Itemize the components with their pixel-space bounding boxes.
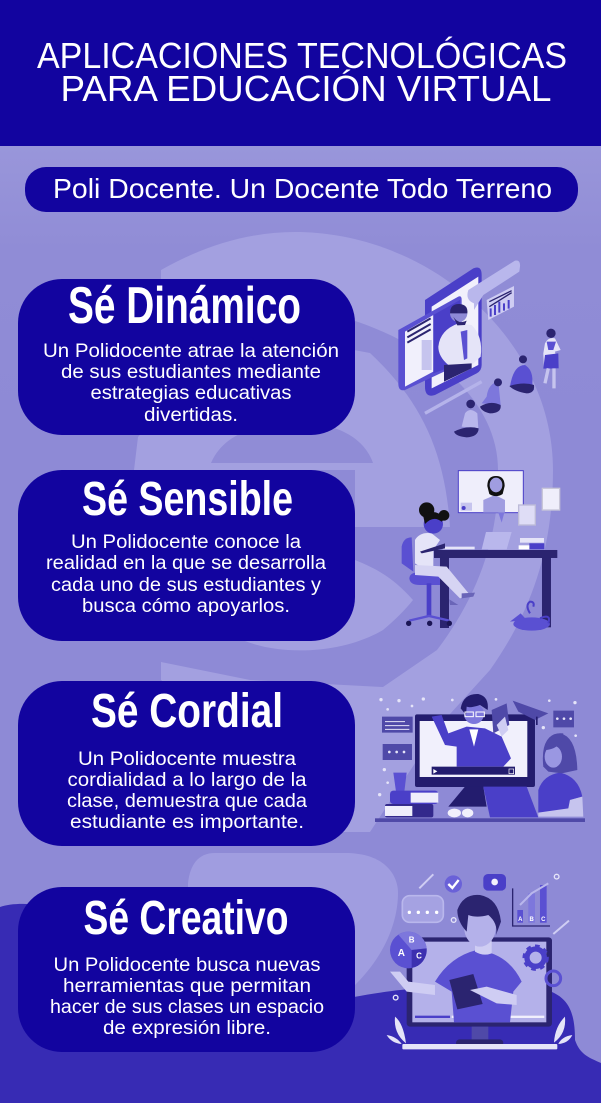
title: APLICACIONES TECNOLÓGICAS: [37, 35, 567, 76]
panel: Sé Dinámico: [18, 277, 355, 435]
illustration: teacher on monitor with charts: A: [398, 948, 405, 959]
panel: Sé Dinámico: Sé Dinámico: [68, 277, 301, 335]
panel: Sé Dinámico: de sus estudiantes mediante: [61, 362, 321, 383]
panel: Sé Dinámico: estrategias educativas: [90, 383, 292, 404]
panel: Sé Creativo: herramientas que permitan: [63, 976, 311, 997]
panel: Sé Cordial: cordialidad a lo largo de la: [68, 770, 307, 791]
panel: Sé Creativo: de expresión libre.: [103, 1018, 271, 1039]
panel: Sé Cordial: estudiante es importante.: [70, 812, 304, 833]
background watermark logo: [134, 232, 553, 985]
illustration: teacher on monitor with charts: C: [416, 951, 422, 960]
panel: Sé Sensible: realidad en la que se desarrolla: [46, 553, 326, 574]
title: PARA EDUCACIÓN VIRTUAL: [60, 68, 552, 109]
panel: Sé Sensible: busca cómo apoyarlos.: [82, 596, 290, 617]
panel: Sé Cordial: Un Polidocente muestra: [78, 749, 296, 770]
header band: [0, 0, 601, 146]
panel: Sé Sensible: Sé Sensible: [82, 473, 293, 526]
subtitle pill: [25, 167, 578, 212]
illustration: teacher on monitor with charts: B: [529, 917, 534, 923]
bottom wave: [0, 904, 601, 1103]
title: [37, 35, 567, 109]
illustration: student at desk with video call: [402, 471, 560, 631]
panel: Sé Dinámico: divertidas.: [144, 405, 238, 426]
illustration: teacher on monitor with charts: B: [409, 936, 415, 945]
illustration: teacher on phone with students: [398, 260, 561, 437]
panel: Sé Creativo: hacer de sus clases un espacio: [50, 997, 324, 1018]
panel: Sé Cordial: Sé Cordial: [91, 685, 283, 738]
panel: Sé Creativo: [18, 887, 355, 1052]
panel: Sé Dinámico: Un Polidocente atrae la atención: [43, 341, 339, 362]
panel: Sé Sensible: Un Polidocente conoce la: [71, 532, 301, 553]
subtitle pill: Poli Docente. Un Docente Todo Terreno: [53, 173, 552, 204]
panel: Sé Creativo: Sé Creativo: [84, 892, 288, 945]
panel: Sé Sensible: cada uno de sus estudiantes y: [51, 575, 322, 596]
panel: Sé Cordial: clase, demuestra que cada: [67, 791, 307, 812]
panel: Sé Sensible: [18, 470, 355, 641]
panel: Sé Creativo: Un Polidocente busca nuevas: [54, 955, 320, 976]
panel: Sé Cordial: [18, 681, 355, 846]
illustration: teacher on monitor with charts: [387, 874, 572, 1049]
illustration: teacher on monitor with charts: A: [518, 917, 523, 923]
illustration: video class on monitor: [375, 694, 585, 822]
illustration: teacher on monitor with charts: C: [541, 917, 546, 923]
